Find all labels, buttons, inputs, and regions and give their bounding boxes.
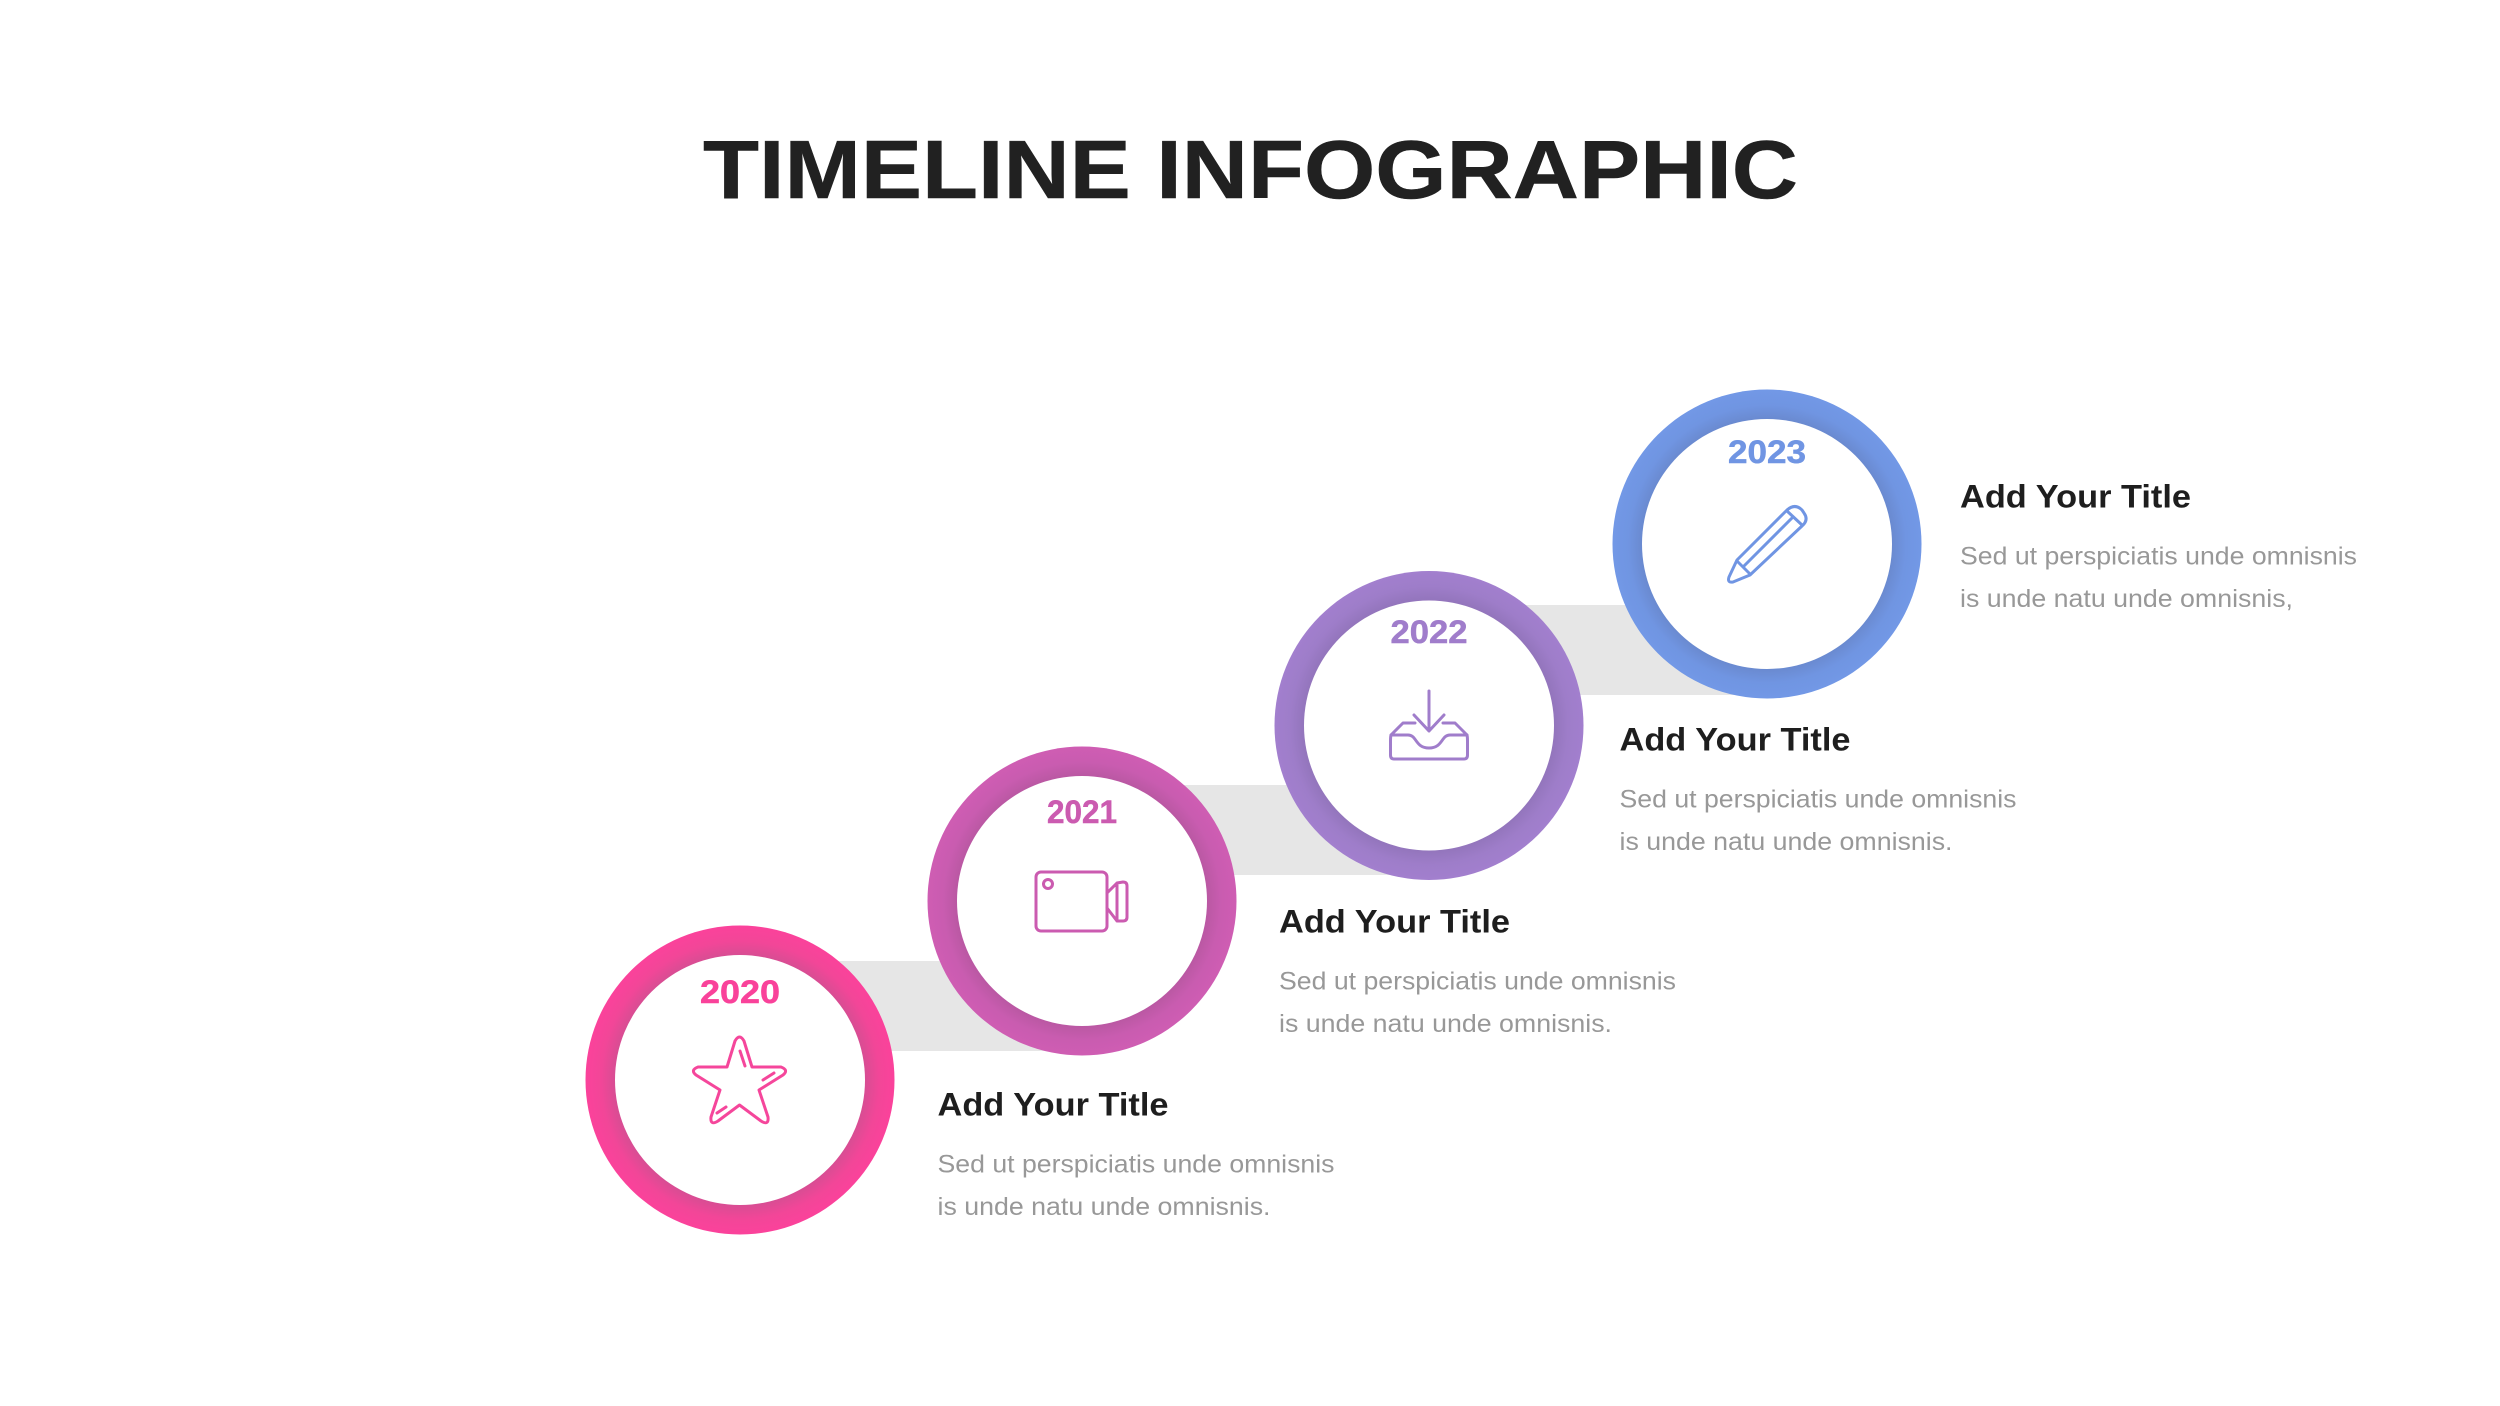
year 2021: 2021 bbox=[1047, 794, 1117, 830]
heading 2020: Add Your Title bbox=[938, 1086, 1168, 1122]
icon: pencil bbox=[1728, 506, 1806, 582]
icon: video camera bbox=[1036, 872, 1127, 931]
ring 2021 bbox=[928, 746, 1236, 1056]
year 2023: 2023 bbox=[1728, 434, 1806, 470]
panel: milestone 2020 bbox=[586, 926, 894, 1234]
inner disc 2023 bbox=[1642, 419, 1892, 669]
body 2023: is unde natu unde omnisnis, bbox=[1960, 585, 2293, 613]
heading 2022: Add Your Title bbox=[1620, 722, 1850, 758]
panel: milestone 2022 bbox=[1274, 571, 1584, 880]
panel: text 2020 bbox=[938, 1086, 1334, 1221]
inner disc 2022 bbox=[1304, 600, 1554, 850]
connector band: 2022 to 2023 bbox=[1429, 605, 1767, 695]
inner disc 2021 bbox=[957, 776, 1207, 1026]
body 2023: Sed ut perspiciatis unde omnisnis bbox=[1960, 542, 2357, 570]
body 2021: Sed ut perspiciatis unde omnisnis bbox=[1279, 968, 1676, 996]
icon: inbox download bbox=[1390, 691, 1468, 759]
body 2022: Sed ut perspiciatis unde omnisnis bbox=[1620, 786, 2016, 814]
panel: text 2023 bbox=[1960, 478, 2357, 613]
body 2021: is unde natu unde omnisnis. bbox=[1279, 1010, 1612, 1038]
inner disc 2020 bbox=[615, 955, 865, 1205]
body 2020: is unde natu unde omnisnis. bbox=[938, 1193, 1270, 1221]
ring 2020 bbox=[586, 926, 894, 1234]
heading 2023: Add Your Title bbox=[1960, 478, 2191, 514]
title: TIMELINE INFOGRAPHIC bbox=[703, 123, 1798, 216]
panel: text 2021 bbox=[1279, 904, 1676, 1038]
ring 2023 bbox=[1612, 390, 1922, 698]
body 2020: Sed ut perspiciatis unde omnisnis bbox=[938, 1150, 1334, 1178]
panel: milestone 2021 bbox=[928, 746, 1236, 1056]
year 2020: 2020 bbox=[700, 974, 780, 1010]
connector band: 2021 to 2022 bbox=[1082, 785, 1429, 875]
body 2022: is unde natu unde omnisnis. bbox=[1620, 828, 1952, 856]
icon: star bbox=[693, 1037, 786, 1123]
panel: milestone 2023 bbox=[1612, 390, 1922, 698]
panel: text 2022 bbox=[1620, 722, 2016, 856]
heading 2021: Add Your Title bbox=[1279, 904, 1510, 940]
connector band: 2020 to 2021 bbox=[740, 961, 1082, 1051]
year 2022: 2022 bbox=[1390, 614, 1468, 650]
ring 2022 bbox=[1274, 571, 1584, 880]
